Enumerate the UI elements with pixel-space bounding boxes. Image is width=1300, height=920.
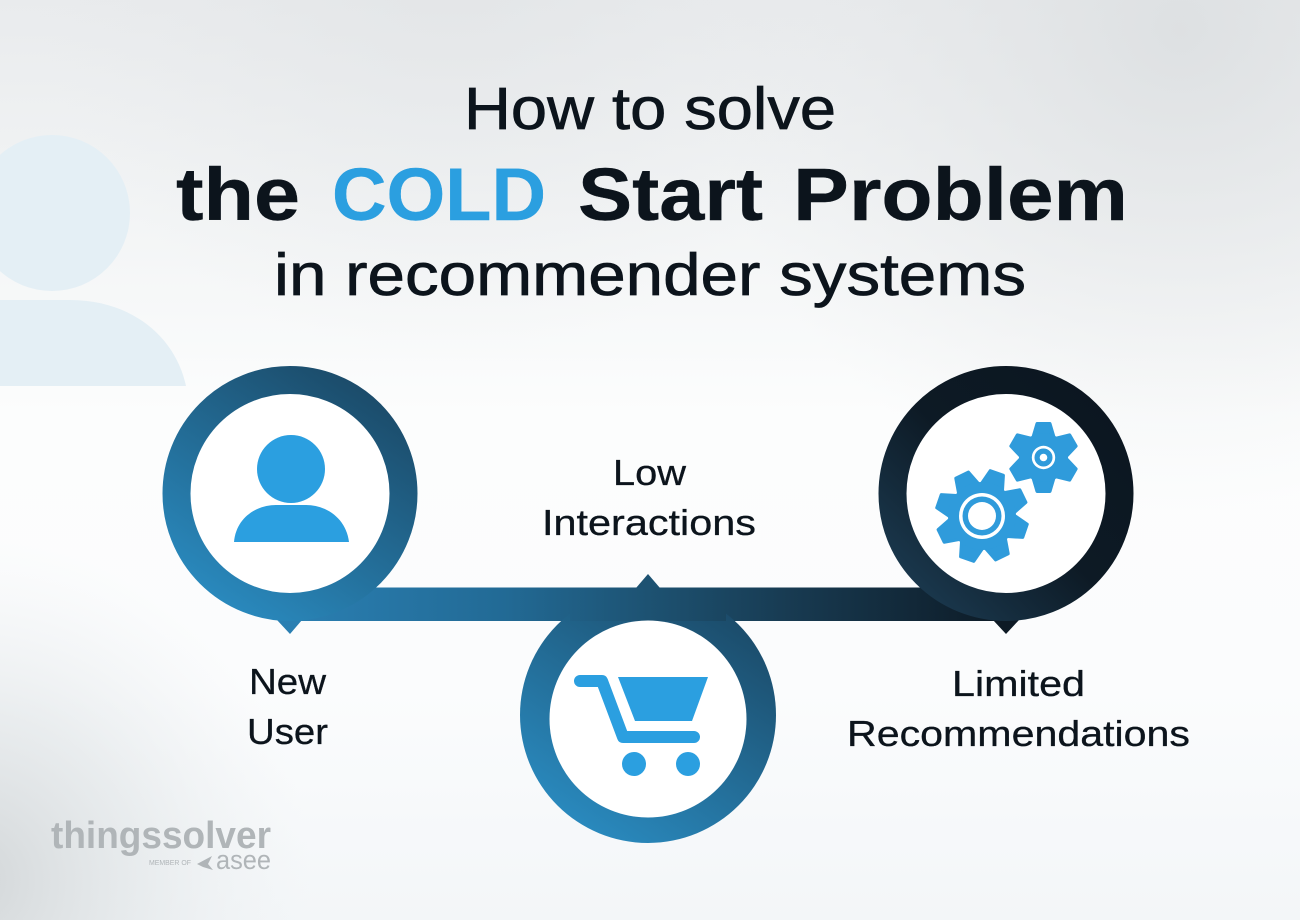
label: limited recommendations: Recommendations	[847, 713, 1190, 754]
icon: large gear	[935, 469, 1029, 563]
node: shopping cart	[520, 587, 776, 843]
connector bar	[290, 574, 1006, 621]
label: low interactions: Interactions	[542, 502, 756, 543]
node: gears	[892, 380, 1120, 634]
title line 1: How to solve	[464, 76, 836, 142]
logo: thingssolver member of asee: MEMBER OF	[149, 858, 191, 867]
label: new user: User	[247, 711, 328, 752]
icon: user	[234, 435, 349, 542]
logo: thingssolver member of asee	[51, 815, 271, 875]
title line 2	[176, 153, 1128, 236]
logo: thingssolver member of asee: thingssolver	[51, 815, 271, 857]
label: limited recommendations	[847, 663, 1190, 754]
label: new user	[247, 661, 328, 752]
icon: shopping cart	[580, 677, 708, 776]
title line 3: in recommender systems	[274, 242, 1026, 308]
icon: small gear	[1009, 424, 1078, 492]
node: new user	[176, 380, 404, 634]
title line 2: the	[176, 153, 300, 236]
label: new user: New	[249, 661, 327, 702]
title	[176, 76, 1128, 308]
watermark: faint person silhouette	[0, 135, 186, 386]
label: low interactions: Low	[613, 452, 687, 493]
label: limited recommendations: Limited	[952, 663, 1085, 704]
title line 2: Problem	[793, 153, 1128, 236]
title line 2: COLD	[332, 153, 546, 236]
logo: thingssolver member of asee: asee	[216, 845, 271, 875]
title line 2: Start	[578, 153, 763, 236]
label: low interactions	[542, 452, 756, 543]
